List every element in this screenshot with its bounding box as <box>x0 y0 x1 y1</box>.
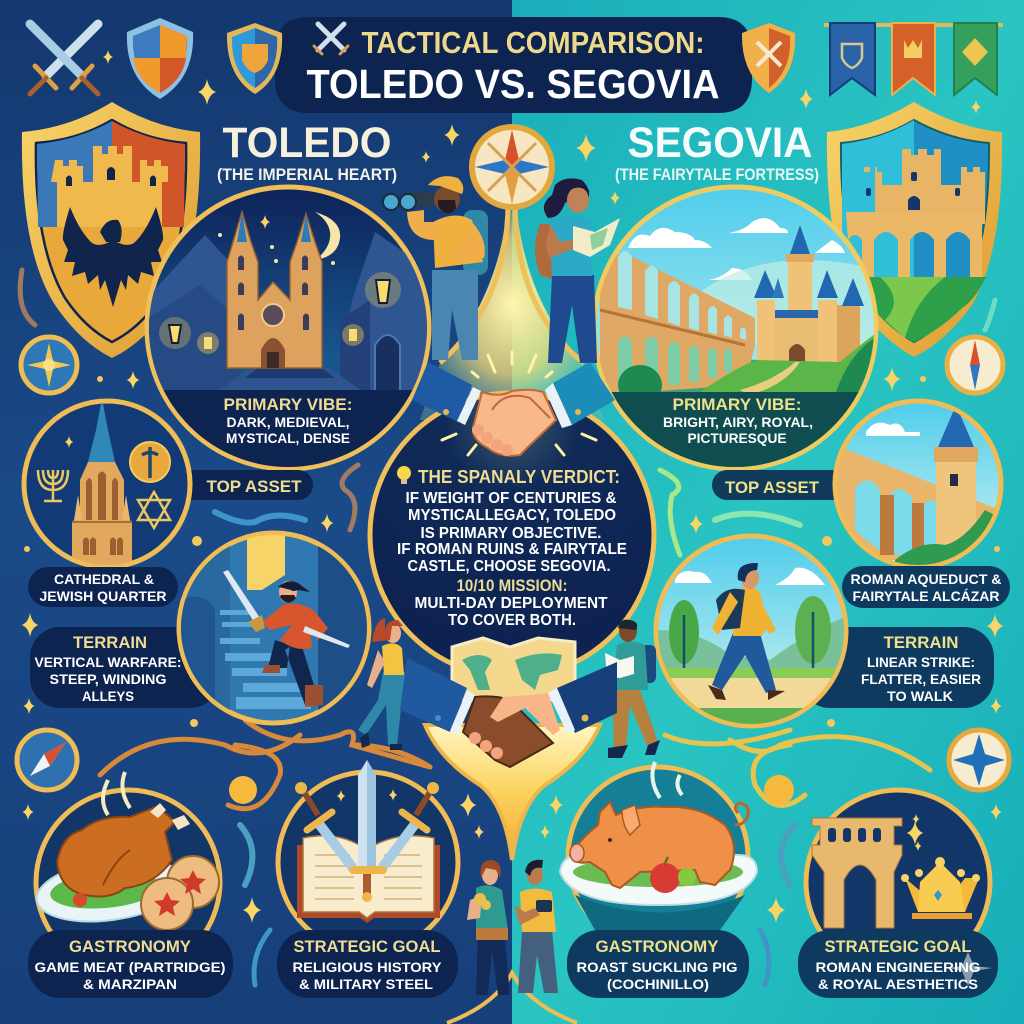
callout: Toledo strategic goal: STRATEGIC GOAL <box>294 937 440 956</box>
walker <box>708 563 785 700</box>
figure: man with map right <box>605 620 660 758</box>
callout: Toledo primary vibe <box>224 395 352 446</box>
corner sparkle mark <box>948 952 992 986</box>
callout: Segovia gastronomy: ROAST SUCKLING PIG <box>576 959 738 975</box>
icon: compass lower right <box>949 730 1009 790</box>
glow behind top handshake <box>420 190 604 420</box>
callout: Toledo primary vibe: MYSTICAL, DENSE <box>226 430 350 446</box>
callout: Segovia primary vibe: PICTURESQUE <box>688 430 786 446</box>
callout: Toledo gastronomy: GAME MEAT (PARTRIDGE) <box>34 959 226 975</box>
panel: Toledo strategic goal <box>278 760 458 952</box>
verdict mission body: TO COVER BOTH. <box>448 612 576 629</box>
panel: Toledo top asset circle <box>24 398 190 570</box>
top handshake <box>412 352 615 456</box>
swordsman <box>223 570 350 707</box>
menorah <box>38 470 68 501</box>
compass top center <box>472 127 552 207</box>
panel: verdict circle <box>370 393 654 677</box>
label: Segovia aqueduct: FAIRYTALE ALCÁZAR <box>852 588 1000 604</box>
callout: Segovia terrain: LINEAR STRIKE: <box>867 654 975 670</box>
central sword <box>358 760 376 866</box>
callout: Segovia terrain <box>800 627 994 708</box>
callout: Segovia terrain: FLATTER, EASIER <box>861 671 981 687</box>
figure: woman hiker left <box>353 618 430 767</box>
background: right teal half <box>512 0 1024 1024</box>
callout: Segovia primary vibe <box>663 395 813 446</box>
night street scene <box>149 210 427 467</box>
small aqueduct <box>846 212 985 277</box>
swirl balls <box>229 775 794 805</box>
icon: light bulb <box>397 466 411 484</box>
verdict body: CASTLE, CHOOSE SEGOVIA. <box>408 558 610 575</box>
panel: Segovia top asset pill <box>712 470 847 500</box>
Toledo coat of arms shield <box>22 102 200 358</box>
panel: Toledo terrain circle <box>179 533 370 735</box>
callout: Segovia gastronomy <box>567 930 749 998</box>
panel: Toledo gastronomy <box>33 772 220 974</box>
icon: crossed swords top left <box>30 24 98 94</box>
subheading: Segovia: (THE FAIRYTALE FORTRESS) <box>615 165 819 184</box>
subheading: Toledo: (THE IMPERIAL HEART) <box>217 165 397 184</box>
aqueduct <box>600 252 755 395</box>
golden funnel under bottom handshake <box>425 725 600 860</box>
figure: woman with map <box>535 178 620 363</box>
panel: Toledo top asset pill: TOP ASSET <box>206 477 302 496</box>
gold arcs around explorers <box>440 195 584 363</box>
callout: Toledo terrain: STEEP, WINDING <box>50 671 167 687</box>
Segovia coat of arms shield <box>827 102 1002 357</box>
callout: Toledo primary vibe: PRIMARY VIBE: <box>224 395 352 414</box>
callout: Toledo terrain: VERTICAL WARFARE: <box>34 654 182 670</box>
icon: top right shield <box>742 23 795 93</box>
pastries <box>167 856 219 908</box>
label backing <box>612 392 858 467</box>
icon: top shield 2 <box>227 23 282 94</box>
stars <box>218 215 335 265</box>
heading: Segovia: SEGOVIA <box>628 119 812 167</box>
lanterns <box>159 272 401 354</box>
bottom handshake <box>400 658 617 767</box>
callout: Toledo terrain: ALLEYS <box>82 688 134 704</box>
callout: Toledo strategic goal: RELIGIOUS HISTORY <box>292 959 442 975</box>
callout: Segovia strategic goal: STRATEGIC GOAL <box>824 937 972 956</box>
steam <box>103 772 130 815</box>
panel: Segovia gastronomy <box>560 762 757 947</box>
right buildings <box>350 232 427 399</box>
gold outline under tourists <box>447 973 577 1023</box>
label: Toledo cathedral: CATHEDRAL & <box>54 571 154 587</box>
figure: explorer with binoculars <box>383 176 488 360</box>
title icon: crossed swords <box>314 24 348 54</box>
callout: Toledo strategic goal: & MILITARY STEEL <box>299 976 433 992</box>
open book <box>297 845 440 923</box>
small castle <box>857 149 985 213</box>
verdict mission heading: 10/10 MISSION: <box>456 576 568 595</box>
bowl <box>575 895 745 930</box>
verdict body: IS PRIMARY OBJECTIVE. <box>420 525 602 542</box>
callout: Segovia strategic goal <box>798 930 998 998</box>
callout: Segovia primary vibe: PRIMARY VIBE: <box>672 395 802 414</box>
title line two: TOLEDO VS. SEGOVIA <box>306 61 720 107</box>
plate <box>33 850 187 930</box>
callout: Toledo gastronomy: GASTRONOMY <box>69 937 192 956</box>
callout: Segovia primary vibe: BRIGHT, AIRY, ROYAL, <box>663 414 813 430</box>
callout: Toledo primary vibe: DARK, MEDIEVAL, <box>226 414 350 430</box>
callout: Toledo gastronomy <box>28 930 233 998</box>
icon: compass left <box>21 337 77 393</box>
verdict mission body <box>414 595 608 629</box>
callout: Toledo gastronomy: & MARZIPAN <box>83 976 177 992</box>
heading: Segovia <box>615 119 819 184</box>
star of david <box>138 492 170 528</box>
icon: compass lower left <box>17 730 77 790</box>
roast pig <box>570 802 734 888</box>
verdict body <box>397 490 627 575</box>
hill <box>700 330 880 470</box>
title banner <box>275 17 752 113</box>
callout: Toledo terrain: TERRAIN <box>73 633 147 652</box>
icon: compass right <box>947 337 1003 393</box>
icon: top shield 1 <box>127 18 193 99</box>
side swords <box>316 820 353 868</box>
figures: two tourists <box>467 860 558 995</box>
icon: banners <box>824 23 1003 95</box>
label: Toledo cathedral: JEWISH QUARTER <box>40 588 166 604</box>
callout: Toledo strategic goal <box>277 930 458 998</box>
hills <box>595 354 760 470</box>
label: Segovia aqueduct: ROMAN AQUEDUCT & <box>850 571 1002 587</box>
callout: Segovia terrain: TERRAIN <box>884 633 958 652</box>
panel: Segovia primary vibe circle <box>590 187 880 492</box>
decorative swirls <box>20 270 995 985</box>
panel: Segovia strategic goal <box>806 790 990 974</box>
verdict mission body: MULTI-DAY DEPLOYMENT <box>414 595 608 612</box>
clouds <box>628 218 845 280</box>
crown <box>901 857 980 919</box>
callout: Segovia strategic goal: ROMAN ENGINEERING <box>816 959 981 975</box>
small stars <box>65 436 73 448</box>
label: Segovia aqueduct <box>842 566 1010 608</box>
label: Toledo cathedral <box>28 567 178 607</box>
panel: Segovia top asset pill: TOP ASSET <box>725 478 820 497</box>
verdict heading: THE SPANALY VERDICT: <box>418 467 620 487</box>
heading: Toledo: TOLEDO <box>222 119 392 167</box>
castle <box>754 225 864 362</box>
left buildings <box>145 235 228 400</box>
verdict body: MYSTICALLEGACY, TOLEDO <box>408 507 616 524</box>
medallion <box>130 442 170 482</box>
panel: Segovia terrain circle <box>655 536 850 730</box>
panel: Toledo primary vibe circle <box>140 187 436 490</box>
cathedral <box>227 212 322 368</box>
background: left navy half <box>0 0 512 1024</box>
icon: map <box>452 638 575 700</box>
callout: Segovia terrain: TO WALK <box>887 688 953 704</box>
title line one: TACTICAL COMPARISON: <box>362 25 704 60</box>
label backing <box>164 390 412 467</box>
callout: Segovia gastronomy: (COCHINILLO) <box>607 976 709 992</box>
callout: Segovia strategic goal: & ROYAL AESTHETICS <box>818 976 978 992</box>
roast bird <box>57 806 175 896</box>
apple <box>650 863 680 893</box>
panel: Segovia top asset circle <box>835 401 1004 570</box>
roman arch <box>812 818 902 928</box>
ground <box>220 368 360 390</box>
verdict body: IF ROMAN RUINS & FAIRYTALE <box>397 541 627 558</box>
verdict body: IF WEIGHT OF CENTURIES & <box>406 490 617 507</box>
panel: Toledo top asset pill <box>170 470 313 500</box>
moon <box>315 212 340 260</box>
steam <box>652 762 682 798</box>
callout: Segovia gastronomy: GASTRONOMY <box>596 937 719 956</box>
callout: Toledo terrain <box>30 627 220 708</box>
